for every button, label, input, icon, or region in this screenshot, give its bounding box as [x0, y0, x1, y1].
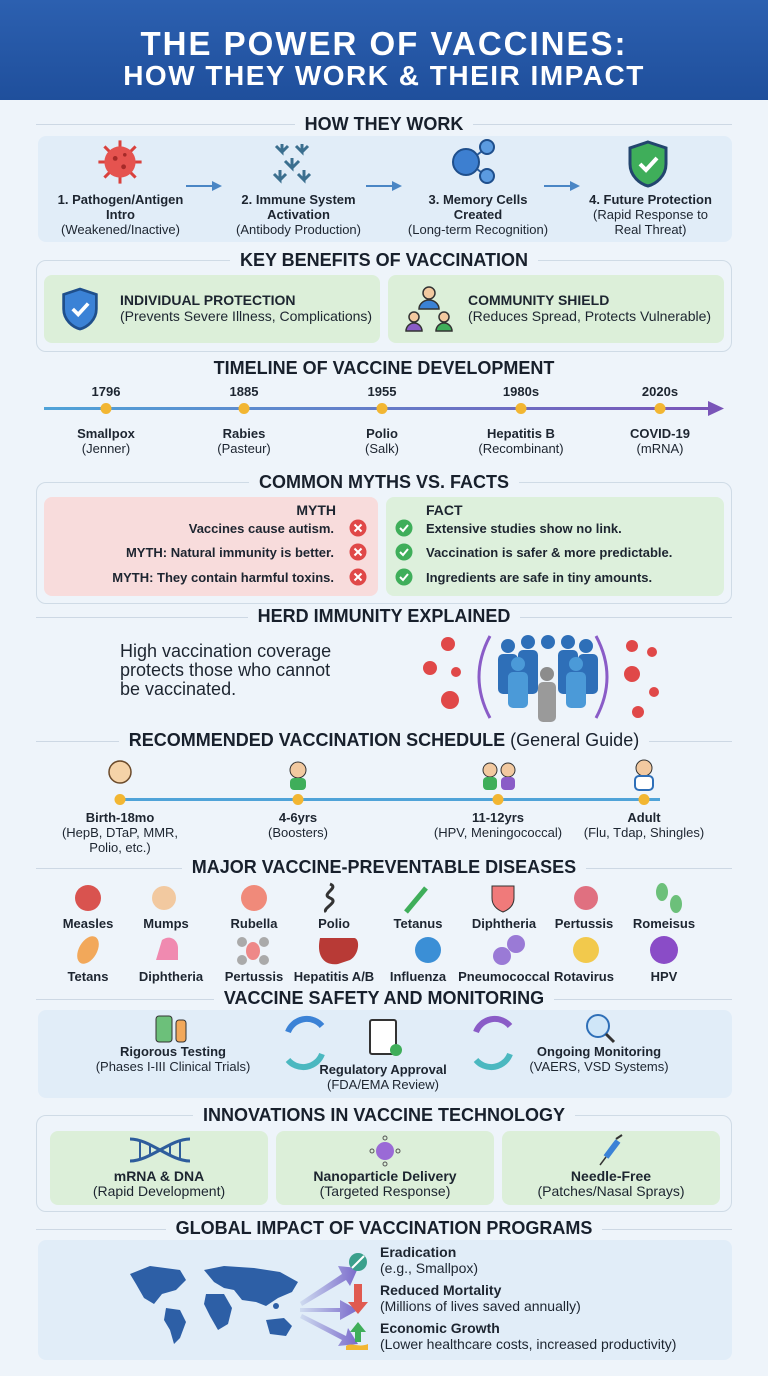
fact column: Extensive studies show no link.: [426, 521, 622, 536]
chart: timeline: (Salk): [365, 441, 399, 456]
card: individual protection: (Prevents Severe Illness, Complications): [120, 308, 372, 324]
grid: diseases: Tetans: [68, 969, 108, 984]
panel: how they work: (Rapid Response to: [593, 207, 708, 222]
chart: schedule timeline: [62, 760, 704, 855]
chart: schedule timeline: 4-6yrs: [279, 810, 317, 825]
icon: antibodies: [273, 144, 311, 184]
step labels: 1. Pathogen/Antigen: [58, 192, 183, 207]
panel: how they work: [38, 136, 732, 242]
step labels: [58, 192, 183, 237]
panel: how they work: (Antibody Production): [236, 222, 361, 237]
impact: eradication: Eradication: [380, 1244, 456, 1260]
grid: diseases: Polio: [318, 916, 350, 931]
fact column: Ingredients are safe in tiny amounts.: [426, 570, 652, 585]
card: mRNA: mRNA & DNA: [114, 1168, 204, 1184]
grid: diseases: [63, 882, 695, 984]
chart: timeline: 1796: [92, 384, 120, 399]
heading: safety: VACCINE SAFETY AND MONITORING: [224, 988, 544, 1008]
heading: innovations: INNOVATIONS IN VACCINE TECHNOLOGY: [203, 1105, 565, 1125]
myth column: [44, 497, 378, 596]
grid: diseases: Mumps: [143, 916, 189, 931]
card: nanoparticle: Nanoparticle Delivery: [313, 1168, 457, 1184]
icon: shield check: [628, 140, 668, 188]
impact: economic growth: [346, 1320, 676, 1352]
arrows: map to impacts: [300, 1266, 358, 1346]
impact: reduced mortality: [348, 1282, 581, 1314]
grid: diseases: Hepatitis A/B: [294, 969, 374, 984]
heading: myths vs facts: COMMON MYTHS VS. FACTS: [259, 472, 509, 492]
grid: diseases: Pertussis: [225, 969, 283, 984]
header banner: THE POWER OF VACCINES:: [140, 25, 628, 62]
chart: timeline: Smallpox: [77, 426, 135, 441]
heading: schedule: RECOMMENDED VACCINATION SCHEDULE (General Guide): [129, 730, 639, 750]
header banner: [0, 0, 768, 100]
impact: economic growth: (Lower healthcare costs, increased productivity): [380, 1336, 676, 1352]
grid: diseases: Measles: [63, 916, 113, 931]
chart: schedule timeline: (Flu, Tdap, Shingles): [584, 825, 704, 840]
step labels: Intro: [106, 207, 135, 222]
text: herd immunity: protects those who cannot: [120, 660, 330, 680]
grid: diseases: Rotavirus: [554, 969, 614, 984]
card: needle-free: [502, 1131, 720, 1205]
chart: schedule timeline: (HepB, DTaP, MMR,: [62, 825, 178, 840]
card: mRNA: [50, 1131, 268, 1205]
text: herd immunity: High vaccination coverage: [120, 641, 331, 661]
myth column: MYTH: [296, 502, 336, 518]
icon: virus: [98, 140, 142, 184]
heading: herd immunity: HERD IMMUNITY EXPLAINED: [258, 606, 510, 626]
chart: schedule timeline: 11-12yrs: [472, 810, 524, 825]
impact: eradication: [349, 1244, 478, 1276]
chart: timeline: [44, 384, 724, 456]
panel: how they work: Activation: [267, 207, 330, 222]
grid: diseases: Pertussis: [555, 916, 613, 931]
chart: schedule timeline: (HPV, Meningococcal): [434, 825, 562, 840]
arrows: [186, 181, 580, 191]
panel: safety: (Phases I-III Clinical Trials): [96, 1059, 250, 1074]
fact column: FACT: [426, 502, 463, 518]
card: mRNA: (Rapid Development): [93, 1183, 225, 1199]
panel: safety: (VAERS, VSD Systems): [529, 1059, 669, 1074]
step labels: (Weakened/Inactive): [61, 222, 180, 237]
grid: diseases: Influenza: [390, 969, 446, 984]
heading: timeline: TIMELINE OF VACCINE DEVELOPMENT: [214, 358, 554, 378]
card: nanoparticle: (Targeted Response): [320, 1183, 450, 1199]
card: community shield: (Reduces Spread, Protects Vulnerable): [468, 308, 711, 324]
grid: diseases: Tetanus: [394, 916, 442, 931]
heading: key benefits: KEY BENEFITS OF VACCINATION: [240, 250, 528, 270]
panel: safety: Regulatory Approval: [319, 1062, 447, 1077]
panel: global impact: [38, 1240, 732, 1360]
grid: diseases: Diphtheria: [139, 969, 203, 984]
myth column: MYTH: They contain harmful toxins.: [112, 570, 334, 585]
chart: timeline: (Jenner): [82, 441, 130, 456]
heading: global impact: GLOBAL IMPACT OF VACCINATION PROGRAMS: [176, 1218, 592, 1238]
panel: how they work: 2. Immune System: [241, 192, 356, 207]
text: herd immunity: [120, 641, 331, 699]
card: individual protection: INDIVIDUAL PROTECTION: [120, 292, 296, 308]
chart: timeline: 1955: [368, 384, 396, 399]
chart: schedule timeline: Birth-18mo: [86, 810, 154, 825]
chart: timeline: Polio: [366, 426, 398, 441]
impact: reduced mortality: (Millions of lives saved annually): [380, 1298, 581, 1314]
chart: timeline: 1980s: [503, 384, 539, 399]
card: individual protection: [44, 275, 380, 343]
card: nanoparticle: [276, 1131, 494, 1205]
impact: eradication: (e.g., Smallpox): [380, 1260, 478, 1276]
impact: economic growth: Economic Growth: [380, 1320, 500, 1336]
icon: memory cells: [452, 139, 495, 184]
card: needle-free: Needle-Free: [571, 1168, 651, 1184]
chart: timeline: (Recombinant): [478, 441, 564, 456]
panel: safety: (FDA/EMA Review): [327, 1077, 439, 1092]
panel: safety: Ongoing Monitoring: [537, 1044, 661, 1059]
panel: safety: [38, 1010, 732, 1098]
impact: reduced mortality: Reduced Mortality: [380, 1282, 501, 1298]
chart: timeline: 1885: [230, 384, 258, 399]
grid: diseases: HPV: [651, 969, 677, 984]
chart: timeline: Rabies: [223, 426, 265, 441]
chart: timeline: 2020s: [642, 384, 678, 399]
card: needle-free: (Patches/Nasal Sprays): [537, 1183, 685, 1199]
chart: schedule timeline: (Boosters): [268, 825, 328, 840]
heading: diseases: MAJOR VACCINE-PREVENTABLE DISEASES: [192, 857, 576, 877]
chart: schedule timeline: Adult: [627, 810, 661, 825]
chart: timeline: (Pasteur): [217, 441, 271, 456]
panel: key benefits: [36, 260, 732, 352]
myth column: Vaccines cause autism.: [189, 521, 334, 536]
chart: timeline: Hepatitis B: [487, 426, 555, 441]
header banner: HOW THEY WORK & THEIR IMPACT: [123, 60, 645, 91]
icon: world map: [130, 1266, 298, 1344]
grid: diseases: Pneumococcal: [458, 969, 550, 984]
grid: diseases: Rubella: [231, 916, 277, 931]
heading: how they work: HOW THEY WORK: [305, 114, 463, 134]
fact column: [386, 497, 724, 596]
fact column: Vaccination is safer & more predictable.: [426, 545, 672, 560]
chart: schedule timeline: Polio, etc.): [89, 840, 151, 855]
chart: timeline: (mRNA): [637, 441, 683, 456]
panel: innovations: [36, 1115, 732, 1212]
grid: diseases: Romeisus: [633, 916, 695, 931]
grid: diseases: Diphtheria: [472, 916, 536, 931]
myth column: MYTH: Natural immunity is better.: [126, 545, 334, 560]
panel: how they work: 3. Memory Cells: [428, 192, 528, 207]
panel: how they work: Created: [454, 207, 502, 222]
panel: myths vs facts: [36, 482, 732, 604]
panel: how they work: Real Threat): [614, 222, 686, 237]
graphic: herd crowd with viruses: [423, 635, 659, 722]
card: community shield: COMMUNITY SHIELD: [468, 292, 609, 308]
chart: timeline: COVID-19: [630, 426, 690, 441]
text: herd immunity: be vaccinated.: [120, 679, 236, 699]
panel: how they work: 4. Future Protection: [589, 192, 712, 207]
panel: safety: Rigorous Testing: [120, 1044, 226, 1059]
panel: how they work: (Long-term Recognition): [408, 222, 548, 237]
card: community shield: [388, 275, 724, 343]
